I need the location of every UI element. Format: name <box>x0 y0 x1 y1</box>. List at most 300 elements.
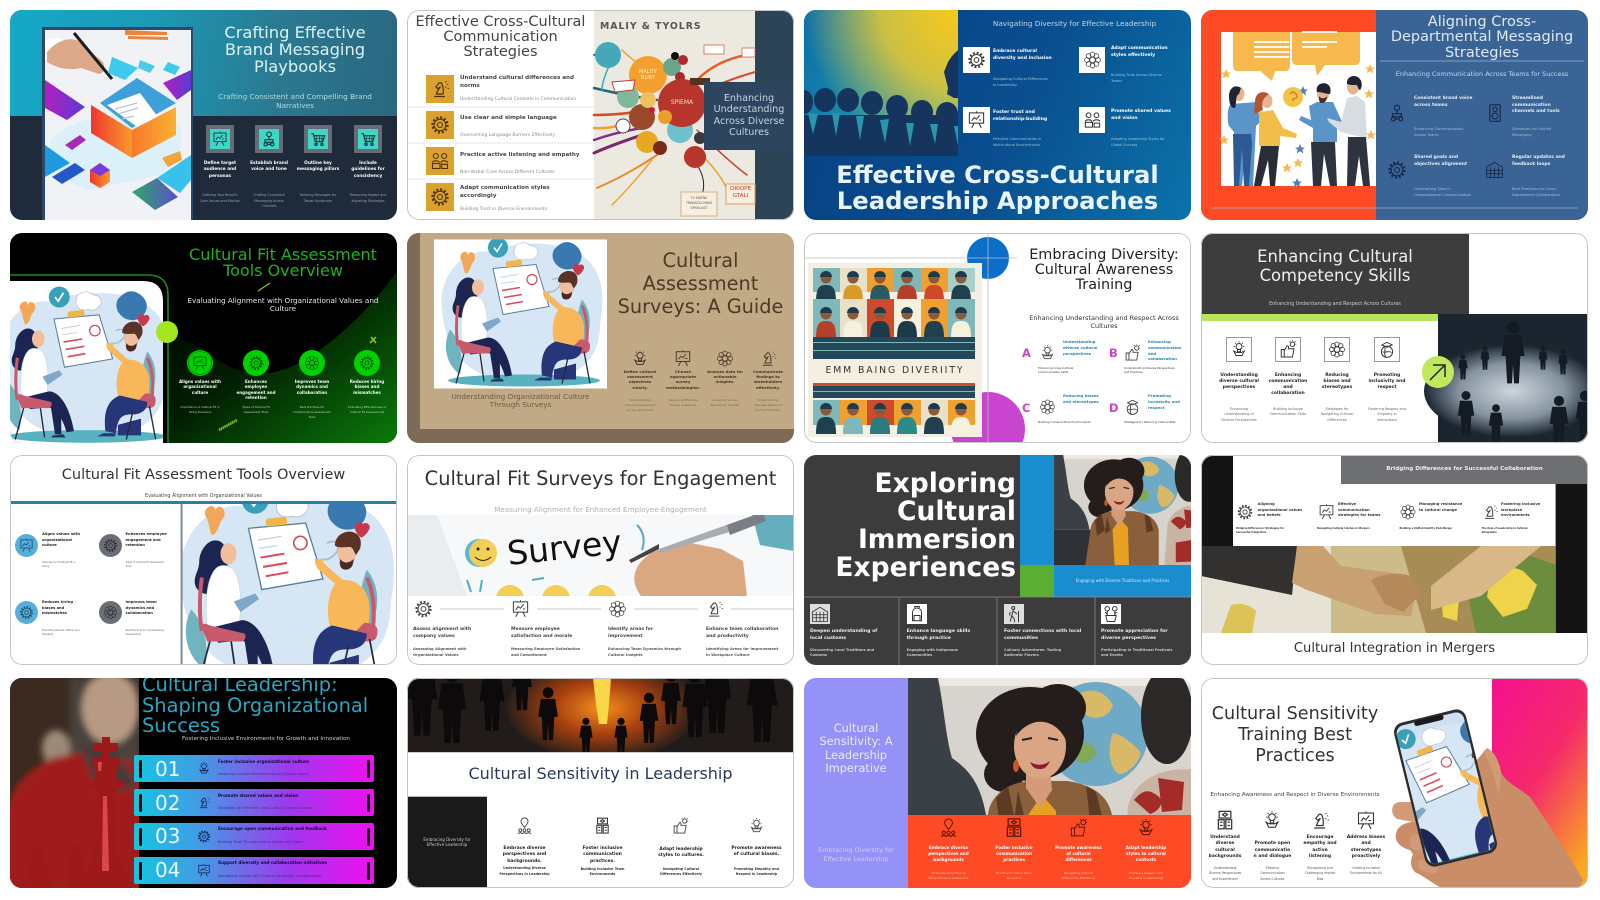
column text: Aligns values with <box>179 379 221 384</box>
column text <box>1101 628 1168 642</box>
column text: and beliefs <box>1258 513 1281 517</box>
icon tile <box>1374 337 1400 362</box>
column text: Outline key <box>304 161 332 166</box>
item text <box>1512 155 1565 168</box>
item text: organizational <box>42 538 72 542</box>
column text: contexts <box>1136 857 1156 862</box>
column: define target audience: Core Values and Mission <box>200 199 240 203</box>
title: Departmental Messaging <box>1391 29 1573 45</box>
column text: Understanding <box>1220 373 1258 378</box>
column text: survey <box>676 379 690 384</box>
item text: across teams <box>1414 103 1448 108</box>
title: Cultural <box>897 496 1016 527</box>
item B: and Practices <box>1124 370 1143 374</box>
overlay panel text: Enhancing <box>724 93 774 104</box>
mind map labels: MALIY & TYOLRS <box>600 21 702 32</box>
column: communicate findings: Changes Based on <box>754 403 782 407</box>
column text <box>228 379 284 401</box>
column: establish brand voice <box>250 125 288 208</box>
column: cultural biases <box>727 846 786 880</box>
column text: to cultural change <box>1419 508 1457 512</box>
title: Aligning Cross- <box>1428 14 1536 30</box>
column: outline pillars: Target Audiences <box>304 199 332 203</box>
column text <box>250 160 288 172</box>
column text: of cultural biases. <box>734 852 779 857</box>
slide: Cultural Integration in Mergers <box>1201 455 1588 665</box>
strategy row 4: Building Trust in Diverse Environments <box>460 207 547 212</box>
slide: Cultural Fit Assessment Tools Overview (light) <box>10 455 397 665</box>
column: adapt leadership <box>1116 845 1176 881</box>
column text: backgrounds <box>1209 854 1241 859</box>
item A: Communication Skills <box>1038 370 1068 374</box>
item: regular updates: Department Collaboration <box>1512 193 1560 197</box>
item B: communication <box>1148 345 1182 350</box>
step 02 <box>134 789 374 816</box>
column text <box>706 626 778 640</box>
column: assess alignment: Assessing Alignment with <box>413 647 467 651</box>
column: diverse perspectives <box>1101 604 1189 660</box>
step 03: Building Trust Through Shared Values and Vision <box>218 840 303 844</box>
column: enhancing communication <box>1264 337 1312 427</box>
column text: communication <box>1269 379 1307 384</box>
dashed row dividers <box>408 106 594 180</box>
caption: Through Surveys <box>490 400 551 409</box>
item: reduces biases: Evaluating Results: Metrics and <box>42 629 80 632</box>
mind map red note: ORIOPE <box>730 186 751 192</box>
column text: Foster inclusive <box>995 845 1033 850</box>
item: aligns values <box>15 531 93 569</box>
icon: cart <box>354 125 382 153</box>
mind map note label: TV MATNE <box>691 196 707 200</box>
icon tile <box>1101 604 1121 624</box>
decorative circles and diversity poster <box>804 233 1191 443</box>
column text: dynamics and <box>296 384 328 389</box>
subtitle: Navigating Diversity for Effective Leadership <box>993 19 1156 28</box>
column text: through practice <box>907 636 951 641</box>
column: open communication <box>1251 835 1293 885</box>
item text: styles effectively <box>1111 52 1155 58</box>
title: Practices <box>1255 746 1335 766</box>
column text: biases and <box>355 384 379 389</box>
column text <box>1004 628 1081 642</box>
column: promoting inclusivity <box>1363 337 1411 427</box>
column text: communication <box>1338 508 1370 512</box>
item text: channels and tools <box>1512 109 1560 114</box>
caption: Cultural Integration in Mergers <box>1294 641 1495 656</box>
column text: messaging pillars <box>297 167 339 172</box>
subtitle: Enhancing Understanding and Respect Across Cultures <box>1269 302 1401 307</box>
mind map orange node label <box>639 69 657 81</box>
item D: Promoting <box>1148 393 1171 398</box>
column text: appropriate <box>670 374 696 379</box>
column: enhances engagement: Types of Cultural Fit <box>242 405 270 409</box>
column: enhances engagement: Assessment Tools <box>244 410 268 414</box>
item text <box>1111 46 1168 58</box>
column: improves dynamics: Implementing Assessment <box>293 410 331 414</box>
column text <box>1313 373 1361 391</box>
mind map red note: GTALI <box>733 193 748 199</box>
title: Cultural Sensitivity <box>1212 704 1378 724</box>
column: understand backgrounds: Diverse Perspectives <box>1209 871 1241 875</box>
column text: Define target <box>204 161 236 166</box>
gradient panel, hand and phone <box>1218 678 1588 888</box>
column: fostering inclusive: Integration <box>1482 531 1497 534</box>
column text: Reduces hiring <box>350 379 384 384</box>
item text: Adapt communication <box>1111 46 1168 51</box>
item: reduces biases <box>15 599 93 637</box>
column: adapt styles: Differences Effectively <box>660 872 702 876</box>
column: improves dynamics: Best Practices for <box>300 405 324 409</box>
title: Communication <box>443 29 558 45</box>
column text: inclusivity and <box>1368 379 1405 384</box>
column text: backgrounds. <box>507 859 542 864</box>
column text: improvement <box>608 634 643 639</box>
column text: Foster inclusive <box>582 846 623 851</box>
photo: chess king and blurred leader <box>10 678 139 888</box>
item: streamlined channels: Strategies for Unified <box>1512 127 1551 131</box>
column: understand backgrounds: Understanding <box>1214 866 1236 870</box>
slide: Effective Cross-Cultural Leadership Approaches <box>804 10 1191 220</box>
column text <box>511 626 572 640</box>
column text: cultural <box>1215 848 1235 853</box>
title: Embracing Diversity: <box>1029 247 1179 263</box>
column: encourage empathy: Bias <box>1317 877 1323 881</box>
item: improves dynamics: Best Practices for Implementing <box>126 629 164 632</box>
column text: and <box>1361 841 1371 846</box>
column: aligning values: Bridging Differences: Strategies for <box>1236 527 1284 530</box>
column text: collaboration <box>297 390 327 395</box>
column: understanding perspectives: Diverse Perspectives <box>1221 418 1257 422</box>
column text: stereotypes <box>1322 385 1352 390</box>
mind map note label <box>686 196 712 210</box>
slide: Cultural Leadership: Shaping Organizational Success <box>10 678 397 888</box>
column text: Address biases <box>1347 835 1385 840</box>
column: improves dynamics: Tools <box>309 415 315 419</box>
column text: diverse <box>1216 841 1234 846</box>
column text: Effective <box>1338 502 1356 506</box>
column text <box>351 160 385 179</box>
item A: Understanding <box>1063 339 1096 344</box>
column: enhancing communication: Communication Skills <box>1270 412 1306 416</box>
item: shared values: Global Success <box>1111 143 1137 147</box>
subtitle: Measuring Alignment for Enhanced Employee Engagement <box>494 505 707 514</box>
column text: Promote awareness <box>1055 845 1102 850</box>
subtitle: Enhancing Communication Across Teams for Success <box>1396 70 1568 78</box>
subtitle: Narratives <box>276 100 314 110</box>
column: fostering inclusive <box>1482 502 1560 536</box>
column: inclusive communication <box>984 845 1044 881</box>
item: enhances engagement: Types of Cultural Fit Assessment <box>126 561 164 564</box>
title: Cultural <box>663 249 738 272</box>
column: identify areas: Cultural Insights <box>608 653 643 657</box>
column text: Managing resistance <box>1419 502 1462 506</box>
title: Crafting Effective <box>224 23 366 42</box>
step 02: Strategies for Effective Cross-Cultural Communication <box>218 806 313 810</box>
column: understanding perspectives <box>1215 337 1263 427</box>
column: diverse perspectives: and Events <box>1101 653 1123 657</box>
column text: proactively <box>1352 854 1380 859</box>
illustration: brand box with cards <box>42 27 193 220</box>
mind map red note <box>730 186 751 199</box>
column text: Identify areas for <box>608 627 653 632</box>
side label: Effective Leadership <box>427 842 467 847</box>
item: aligns values: Hiring <box>42 565 49 568</box>
column text: Improves team <box>295 379 329 384</box>
column: promoting inclusivity: Empathy in <box>1377 412 1397 416</box>
slide: Cultural Sensitivity Training Best Practices <box>1201 678 1588 888</box>
column: enhance collaboration <box>706 626 791 658</box>
strategy row 3: Non-Verbal Cues Across Different Cultures <box>460 170 554 175</box>
mind map note label: SPIOILAST <box>691 206 707 210</box>
column: analyze data: Results for Insights <box>711 403 739 407</box>
column text <box>1116 845 1176 863</box>
item text <box>1512 96 1560 116</box>
title: Effective Cross-Cultural <box>836 160 1159 189</box>
item text: and vision <box>1111 116 1138 120</box>
slide: Enhancing Cultural Competency Skills <box>1201 233 1588 443</box>
step 04: Support diversity and collaboration initiatives <box>218 860 327 865</box>
item: enhances engagement <box>98 531 176 569</box>
title <box>835 470 1016 582</box>
strategy row 4 <box>426 183 550 212</box>
subtitle: Fostering Inclusive Environments for Growth and Innovation <box>182 736 350 742</box>
column text: effectively. <box>756 385 780 390</box>
title: Cultural Awareness <box>1035 262 1173 278</box>
item: consistent voice <box>1414 96 1504 140</box>
slide: Cultural Sensitivity: A Leadership Imperative <box>804 678 1191 888</box>
item text: mismatches <box>42 611 67 615</box>
item: foster trust: Effective Communication in <box>993 137 1041 141</box>
item C: Reducing biases <box>1063 393 1099 398</box>
column text <box>1215 373 1263 391</box>
row text: Practice active listening and empathy <box>460 152 580 158</box>
title: Imperative <box>825 762 887 775</box>
item text: Enhances employee <box>126 532 167 536</box>
column: measure satisfaction: Measuring Employee Satisfaction <box>511 647 580 651</box>
column text: personas <box>209 174 231 179</box>
column text: Include <box>359 161 377 166</box>
column text: organizational <box>183 384 217 389</box>
column: enhancing communication: Building Inclusive <box>1273 407 1303 411</box>
column text <box>1048 845 1109 863</box>
step text: 02 <box>155 790 180 814</box>
column: choose methodologies: Survey Questions <box>670 403 696 407</box>
title: Experiences <box>835 552 1016 583</box>
column text: Enhance team collaboration <box>706 627 778 632</box>
item text: objectives alignment <box>1414 162 1467 167</box>
column text: audience and <box>204 167 236 172</box>
title: Assessment <box>643 272 758 295</box>
background wave and consult illustration <box>10 233 397 443</box>
column text: employee <box>245 384 267 389</box>
column: communicate findings: Survey Feedback <box>755 408 781 412</box>
item: adapt styles: Teams <box>1111 79 1122 83</box>
item: shared goals: Organizational Communication <box>1414 193 1471 197</box>
subtitle: Effective Leadership <box>823 855 889 863</box>
step text: 04 <box>155 858 180 882</box>
column: adapt leadership: Empathy in Leadership <box>1129 876 1163 880</box>
photo and orange panel <box>804 678 1191 888</box>
column: cultural biases: Respect in Leadership <box>736 872 777 876</box>
icon tile <box>810 604 830 624</box>
column text: listening <box>1309 854 1331 859</box>
item: shared values <box>1079 107 1191 152</box>
side label <box>407 837 487 847</box>
column: diverse perspectives: Understanding Diverse <box>503 866 546 870</box>
strategy row 1 <box>426 75 576 103</box>
column: define target audience <box>200 125 240 203</box>
column text: Enhancing <box>1275 373 1301 378</box>
icon tile <box>1324 337 1350 362</box>
column text <box>662 369 704 390</box>
title <box>183 247 383 279</box>
column text <box>495 846 554 865</box>
item A: diverse cultural <box>1063 345 1097 350</box>
item A: perspectives <box>1063 350 1091 356</box>
step 03: Encourage open communication and feedback <box>218 826 327 831</box>
column text <box>1258 502 1302 519</box>
column text <box>1299 835 1341 860</box>
icon tile: gear head <box>426 183 454 211</box>
step 02: Promote shared values and vision <box>218 792 298 798</box>
column text: insights. <box>716 379 734 384</box>
icon: green badge <box>187 350 213 376</box>
column text: communication <box>996 851 1032 856</box>
item text <box>993 110 1047 123</box>
item text: biases and <box>42 606 64 610</box>
column text <box>573 846 632 865</box>
column: awareness: Navigating Cultural <box>1064 870 1093 874</box>
column text: differences <box>1065 857 1092 862</box>
strategy row 3 <box>426 147 580 175</box>
column: open communication: Across Cultures <box>1260 877 1284 881</box>
column text <box>413 626 471 640</box>
column: adapt styles: Navigating Cultural <box>663 866 699 870</box>
title <box>1201 704 1389 766</box>
poster banner text: EMM BAING DIVERIITY <box>825 365 964 376</box>
column: local communities <box>1004 604 1092 660</box>
column text <box>619 369 661 390</box>
column text <box>172 379 228 395</box>
column text: objectives <box>629 379 651 384</box>
title: Cultural Fit Assessment <box>189 245 377 264</box>
column: understanding perspectives: Enhancing <box>1230 407 1248 411</box>
column: address biases: Environments for All <box>1350 871 1382 875</box>
column text <box>1251 841 1293 860</box>
item text: culture <box>42 543 57 547</box>
column text: diverse cultural <box>1219 379 1259 384</box>
overlay panel text: Understanding <box>714 104 784 115</box>
item B <box>1108 339 1191 377</box>
column text: respect <box>1377 385 1397 390</box>
column: assess alignment: Organizational Values <box>413 653 459 657</box>
item C: and stereotypes <box>1063 399 1099 404</box>
title: Playbooks <box>254 57 336 76</box>
title: Enhancing Cultural <box>1257 247 1413 266</box>
column: reducing biases: Navigating Cultural <box>1321 412 1353 416</box>
column text: Promote awareness <box>731 846 782 851</box>
icon disc <box>98 601 122 624</box>
column text: communication <box>583 852 622 857</box>
column: understanding perspectives: Understanding of <box>1224 412 1254 416</box>
column: embrace perspectives <box>918 845 979 881</box>
column text: Analyze data for <box>707 369 743 374</box>
photo: crowd around glowing figure <box>407 678 794 888</box>
item: shared values: Adapting Leadership Styles for <box>1111 137 1165 141</box>
column text: Establish brand <box>250 161 288 166</box>
column text: retention <box>245 395 267 400</box>
column: awareness: Differences Effectively <box>1062 876 1095 880</box>
column text <box>296 160 340 172</box>
title: Shaping Organizational <box>142 694 368 716</box>
column text: and productivity <box>706 634 749 639</box>
title: Cultural Fit Surveys for Engagement <box>425 467 776 490</box>
subtitle: Evaluating Alignment with Organizational Values <box>145 494 262 499</box>
column: adapt styles <box>652 846 710 880</box>
step 01 <box>134 755 374 782</box>
column text: organizational values <box>1258 508 1302 512</box>
column: communicate findings: Implementing <box>758 398 778 402</box>
title <box>142 675 368 736</box>
icon: cart <box>304 125 332 153</box>
column text: backgrounds <box>933 857 964 862</box>
item C <box>1022 393 1106 427</box>
strategy row 2 <box>426 111 557 139</box>
subtitle: Crafting Consistent and Compelling Brand <box>218 92 372 101</box>
item B: collaboration <box>1148 356 1177 361</box>
column: aligns values: Hiring Decisions <box>189 410 211 414</box>
icon tile <box>1226 337 1252 362</box>
caption <box>434 393 607 409</box>
column: aligning values: Successful Integration <box>1236 531 1266 534</box>
column text <box>284 379 340 395</box>
column text: Promote appreciation for <box>1101 629 1168 634</box>
step text: 01 <box>155 756 180 780</box>
column: measure satisfaction: and Commitment <box>511 653 547 657</box>
subtitle: Enhancing Awareness and Respect in Diverse Environments <box>1210 792 1380 798</box>
column text: stakeholders <box>754 379 782 384</box>
item text: Foster trust and <box>993 110 1035 115</box>
column text: of cultural <box>1066 851 1091 856</box>
item text: Promote shared values <box>1111 109 1171 114</box>
icon tile <box>963 107 990 133</box>
blocks and handshake photo <box>1201 455 1588 633</box>
item: consistent voice: Enhancing Communication <box>1414 127 1464 131</box>
column: enhances engagement <box>228 350 284 420</box>
item text: Improves team <box>126 600 157 604</box>
column text <box>652 846 710 859</box>
column text <box>1338 502 1380 519</box>
column: include guidelines: Measuring Impact and <box>350 193 386 197</box>
item text <box>42 600 73 617</box>
column: assess alignment <box>413 626 503 658</box>
step slots and icon <box>134 755 374 782</box>
item text: feedback loops <box>1512 162 1550 167</box>
column: define objectives <box>619 369 661 415</box>
step 01: Foster inclusive organizational culture <box>218 758 309 764</box>
column: promoting inclusivity: Fostering Respect and <box>1368 407 1406 411</box>
item text <box>993 48 1052 60</box>
column: embrace perspectives: Perspectives in Leadership <box>928 876 969 880</box>
mind map orange node label: BLISY <box>641 75 655 81</box>
column text: voice and tone <box>251 167 287 172</box>
slide: Cultural Fit Surveys for Engagement <box>407 455 794 665</box>
item text: Consistent brand voice <box>1414 96 1472 101</box>
column: include guidelines <box>350 125 386 203</box>
column: managing resistance <box>1400 502 1478 536</box>
column: aligning values <box>1236 502 1314 536</box>
item text <box>126 600 157 617</box>
